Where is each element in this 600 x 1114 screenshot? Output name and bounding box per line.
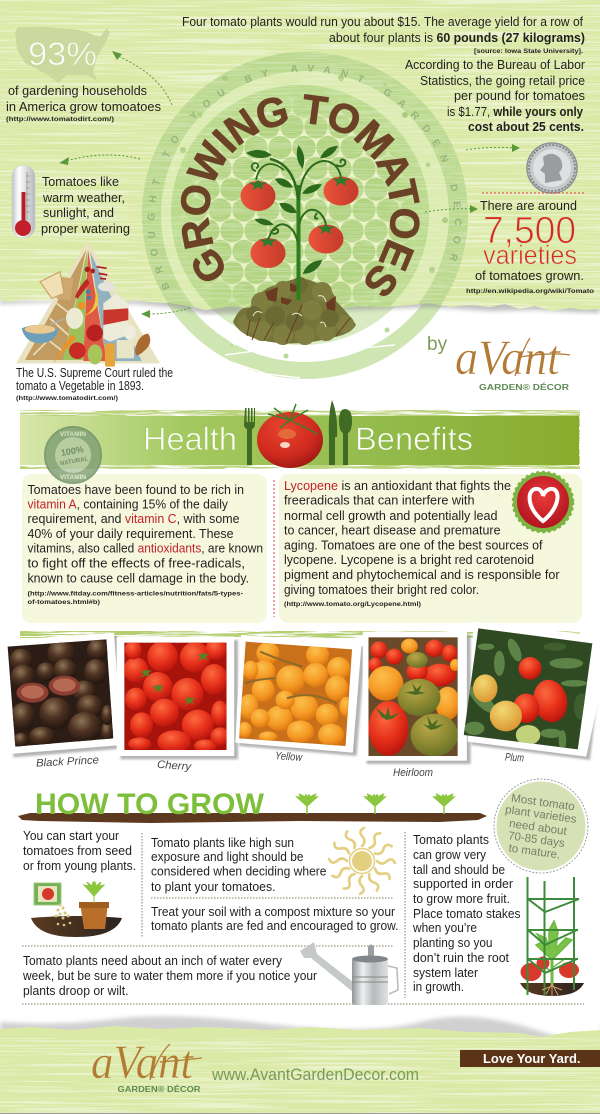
icon: quarter coin — [527, 143, 577, 193]
stat: 7,500 varieties — [466, 199, 594, 295]
icon: thermometer and warm weather text: warm weather, — [42, 191, 125, 205]
leaves — [246, 143, 340, 277]
logo: footer Avant Garden Decor: GARDEN® DÉCOR — [118, 1085, 201, 1094]
panel: lycopene: normal cell growth and potentially lead — [284, 509, 498, 523]
text: stakes: in growth. — [413, 980, 464, 994]
milk carton — [103, 294, 128, 342]
text: cost of plants: per pound for tomatoes — [454, 89, 585, 103]
tomato — [324, 176, 358, 206]
photo: Heirloom — [363, 632, 471, 764]
text: start from seed — [23, 829, 136, 873]
text: Supreme Court — [16, 366, 173, 402]
photo captions: Yellow — [275, 750, 303, 764]
panel: vitamins: to fight off the effects of free-radicals, — [28, 556, 245, 570]
icon: knife — [329, 400, 337, 465]
text: sun exposure: exposure and light should be — [151, 850, 304, 864]
text: watering: plants droop or wilt. — [23, 984, 128, 998]
text: stakes: system later — [413, 966, 478, 980]
panel: lycopene: lycopene. Lycopene is a bright red carotenoid — [284, 553, 534, 567]
map of USA with 93% stat: in America grow tomoatoes — [6, 100, 161, 114]
icon: fork — [244, 408, 255, 465]
text: cost of plants: cost about 25 cents. — [468, 120, 584, 134]
panel: vitamins: Tomatoes have been found to be rich in — [28, 483, 244, 497]
food pyramid — [16, 241, 160, 367]
icon: thermometer and warm weather text: Tomatoes like — [42, 175, 119, 189]
divider red vertical — [273, 480, 275, 617]
text: compost: tomato plants are fed and encouraged to grow. — [151, 919, 398, 933]
torn paper shadow — [0, 300, 600, 314]
footer torn paper shadow — [0, 1016, 600, 1041]
header green textured panel — [0, 0, 600, 320]
bread — [57, 277, 73, 300]
text: start from seed: You can start your — [23, 829, 119, 843]
text: cost of plants: is $1.77, while yours only — [447, 105, 583, 119]
text: watering — [22, 954, 317, 998]
panel: vitamins: (http://www.fitday.com/fitness-articles/nutrition/fats/5-types- — [28, 590, 243, 598]
map of USA with 93% stat: 93% — [28, 36, 97, 72]
text: stakes: tall and should be — [413, 863, 505, 877]
bowl — [22, 325, 59, 343]
dotted dividers — [22, 832, 584, 1004]
text: cost of plants: about four plants is 60 pounds (27 kilograms) — [329, 31, 585, 45]
icon: spoon — [339, 409, 352, 465]
text: stakes: Tomato plants — [413, 833, 489, 847]
logo: by Avant Garden Decor: aVant — [455, 329, 561, 385]
text: watering: Tomato plants need about an inch of water every — [23, 954, 283, 968]
icon: thermometer and warm weather text — [12, 165, 130, 238]
panel: lycopene: aging. Tomatoes are one of the best sources of — [284, 538, 543, 552]
icon: trellis plant — [520, 877, 584, 996]
text: cost of plants: Four tomato plants would run you about $15. The average yield for a row of — [182, 15, 584, 29]
text: stakes: don’t ruin the root — [413, 951, 510, 965]
icon: watering can — [300, 942, 398, 1005]
title: Growing Tomatoes: GROWING TOMATOES — [180, 94, 420, 296]
text: cost of plants: According to the Bureau of Labor — [405, 58, 585, 72]
panel: vitamins: vitamins, also called antioxidants, are known — [28, 542, 263, 556]
text: compost: Treat your soil with a compost mixture so your — [151, 905, 395, 919]
photo: Black Prince — [2, 633, 126, 757]
text: cost of plants: Statistics, the going retail price — [420, 74, 585, 88]
tagline bar — [460, 1050, 600, 1067]
tomato — [250, 237, 286, 268]
panel: vitamins: of-tomatoes.html#b) — [28, 599, 100, 606]
photo: Cherry — [117, 637, 238, 759]
callout badge: days to mature: need about — [508, 818, 568, 838]
health benefits banner: Benefits — [355, 421, 473, 457]
callout badge: days to mature: Most tomato — [510, 793, 575, 813]
icon: vitamin stamp: 100% — [60, 444, 85, 458]
photo captions: Black Prince — [36, 754, 99, 770]
tomato plant — [240, 143, 358, 300]
panel: lycopene — [279, 472, 582, 623]
icon: heart badge — [513, 472, 573, 532]
brown earth patches — [265, 283, 336, 311]
photo captions: Cherry — [157, 759, 193, 773]
medallion lower half below the tear — [166, 303, 442, 379]
stat: 7,500 varieties: varieties — [483, 240, 577, 270]
how to grow heading with soil and sprouts: HOW TO GROW — [35, 788, 265, 821]
photo gallery — [2, 622, 600, 764]
panel: lycopene: pigment and phytochemical and is responsible for — [284, 568, 560, 582]
sprout — [365, 794, 385, 814]
callout badge: days to mature: 70-85 days — [507, 830, 566, 850]
icon: big tomato — [257, 404, 323, 468]
callout badge: days to mature: plant varieties — [504, 804, 578, 826]
callout badge: days to mature: to mature. — [508, 842, 561, 862]
wood grain over medallion — [142, 53, 468, 303]
panel: lycopene: giving tomatoes their bright red color. — [284, 583, 479, 597]
icon: thermometer and warm weather text: proper watering — [41, 222, 130, 236]
sprout — [297, 794, 317, 814]
panel: vitamins — [22, 474, 267, 623]
icon: vitamin stamp: VITAMIN — [60, 431, 86, 438]
stat: 7,500 varieties: of tomatoes grown. — [475, 269, 584, 283]
panel: lycopene: freeradicals that can interfere with — [284, 494, 475, 508]
text: stakes: to grow more fruit. — [413, 892, 510, 906]
text: sun exposure — [151, 836, 327, 894]
text: start from seed: tomatoes from seed — [23, 844, 132, 858]
icon: sun — [329, 828, 395, 894]
photo: Yellow — [235, 635, 365, 756]
logo: by Avant Garden Decor: by — [427, 334, 448, 355]
logo: by Avant Garden Decor: GARDEN® DÉCOR — [479, 383, 569, 392]
stat: 7,500 varieties: http://en.wikipedia.org/wiki/Tomato — [466, 288, 594, 295]
icon: vitamin stamp: NATURAL — [60, 456, 89, 467]
tomato — [308, 224, 344, 254]
photo captions: Plum — [505, 752, 524, 765]
panel: vitamins: 40% of your daily requirement. These — [28, 527, 234, 541]
text: stakes: when you’re — [412, 921, 477, 935]
icon: thermometer and warm weather text: sunlight, and — [43, 206, 114, 220]
panel: vitamins: requirement, and vitamin C, with some — [28, 512, 240, 526]
divider red dashed — [482, 192, 586, 194]
text: sun exposure: to plant your tomatoes. — [151, 880, 276, 894]
icon: seeds and pot — [31, 882, 122, 937]
text: Supreme Court: (http://www.tomatodirt.com/) — [16, 395, 118, 402]
text: stakes: planting so you — [413, 936, 493, 950]
photo captions: Heirloom — [393, 767, 433, 779]
stat: 7,500 varieties: 7,500 — [483, 210, 576, 252]
logo: footer Avant Garden Decor: aVant — [91, 1036, 195, 1089]
text: compost — [151, 905, 398, 933]
text: cost of plants — [182, 15, 585, 134]
photo: Plum — [464, 622, 600, 760]
map of USA with 93% stat: of gardening households — [8, 84, 147, 98]
medallion circle — [142, 52, 468, 310]
stat: 7,500 varieties: There are around — [480, 199, 577, 213]
text: stakes: Place tomato stakes — [413, 907, 520, 921]
sprout — [434, 794, 454, 814]
map of USA with 93% stat — [6, 27, 161, 123]
icon: vitamin stamp — [45, 427, 101, 483]
ring text: BROUGHT TO YOU BY AVANT GARDEN DECOR — [148, 64, 462, 290]
tagline bar: Love Your Yard. — [483, 1051, 580, 1066]
how to grow heading with soil and sprouts — [18, 788, 487, 823]
text: watering: week, but be sure to water them more if you notice your — [22, 969, 317, 983]
photo captions — [36, 750, 524, 779]
panel: lycopene: Lycopene is an antioxidant that fights the — [284, 479, 511, 493]
health benefits banner: Health — [143, 421, 237, 457]
text: stakes — [412, 833, 520, 994]
text: Supreme Court: tomato a Vegetable in 1893. — [16, 379, 144, 393]
soil mound — [233, 277, 356, 345]
text: sun exposure: considered when deciding where — [151, 865, 327, 879]
text: Supreme Court: The U.S. Supreme Court ruled the — [16, 366, 173, 380]
health benefits banner — [20, 400, 580, 469]
footer green panel — [0, 1026, 600, 1114]
text: stakes: supported in order — [413, 877, 513, 891]
torn green strip behind photos — [20, 631, 580, 638]
arrows dashed — [59, 51, 520, 318]
map of USA with 93% stat: (http://www.tomatodirt.com/) — [6, 116, 114, 123]
callout badge: days to mature — [494, 779, 588, 873]
icon: vitamin stamp: VITAMIN — [60, 474, 86, 481]
tomato — [240, 180, 276, 211]
panel: vitamins: vitamin A, containing 15% of the daily — [28, 498, 229, 512]
text: stakes: can grow very — [413, 848, 487, 862]
website url: www.AvantGardenDecor.com — [211, 1066, 419, 1084]
veg — [53, 334, 76, 363]
panel: lycopene: (http://www.tomato.org/Lycopene.html) — [284, 601, 421, 608]
text: start from seed: or from young plants. — [23, 859, 136, 873]
text: cost of plants: [source: Iowa State University]. — [474, 48, 583, 55]
text: sun exposure: Tomato plants like high sun — [151, 836, 294, 850]
panel: vitamins: known to cause cell damage in the body. — [28, 572, 249, 586]
panel: lycopene: to cancer, heart disease and premature — [284, 524, 501, 538]
